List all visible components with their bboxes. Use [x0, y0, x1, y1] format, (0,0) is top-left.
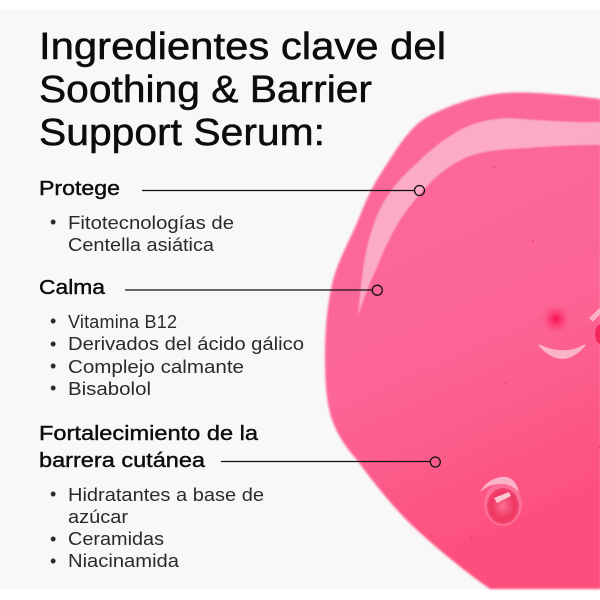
- title: Support Serum:: [39, 112, 325, 154]
- list: Fortalecimiento: •: [50, 529, 56, 549]
- callout line: Calma: [125, 285, 382, 295]
- specks: [470, 166, 600, 538]
- list: Fortalecimiento: Ceramidas: [68, 529, 164, 549]
- callout line: Protege: [142, 186, 424, 196]
- right reflection: [591, 310, 600, 320]
- list: Fortalecimiento: •: [50, 551, 56, 571]
- list: Protege: Fitotecnologías de: [68, 213, 234, 233]
- list: Calma: Bisabolol: [68, 379, 151, 399]
- list: Calma: Vitamina B12: [68, 312, 177, 332]
- section: Protege: [39, 178, 424, 255]
- list: Calma: Derivados del ácido gálico: [68, 334, 304, 354]
- list: Protege: [50, 212, 234, 255]
- list: Protege: Centella asiática: [68, 235, 215, 255]
- heading: Protege: Protege: [39, 178, 120, 200]
- dimple reflection: [539, 345, 585, 358]
- title: [39, 26, 446, 154]
- list: Fortalecimiento: Hidratantes a base de: [68, 485, 264, 505]
- list: Fortalecimiento: •: [50, 484, 56, 504]
- list: Calma: •: [50, 356, 56, 376]
- right dimple: [595, 324, 600, 344]
- list: Calma: Complejo calmante: [68, 357, 244, 377]
- list: Fortalecimiento: Niacinamida: [68, 551, 180, 571]
- heading: Fortalecimiento: barrera cutánea: [39, 450, 206, 472]
- list: Calma: •: [50, 311, 56, 331]
- swatch body: [325, 92, 600, 589]
- section: Calma: [39, 277, 382, 399]
- list: Fortalecimiento: azúcar: [68, 507, 128, 527]
- title: Ingredientes clave del: [39, 26, 446, 68]
- centre dimple: [539, 302, 573, 336]
- droplet: [480, 477, 522, 526]
- callout line: Fortalecimiento: [221, 457, 440, 467]
- heading: Calma: Calma: [39, 277, 106, 299]
- title: Soothing & Barrier: [39, 69, 372, 111]
- heading: Fortalecimiento: Fortalecimiento de la: [39, 423, 259, 445]
- list: Calma: •: [50, 378, 56, 398]
- section: Fortalecimiento: [39, 423, 440, 571]
- heading: Fortalecimiento: [39, 423, 259, 472]
- list: Fortalecimiento: [50, 484, 264, 571]
- list: Calma: •: [50, 334, 56, 354]
- list: Protege: •: [50, 212, 56, 232]
- glossy highlight: [358, 118, 600, 316]
- serum swatch: [325, 92, 600, 589]
- list: Calma: [50, 311, 304, 399]
